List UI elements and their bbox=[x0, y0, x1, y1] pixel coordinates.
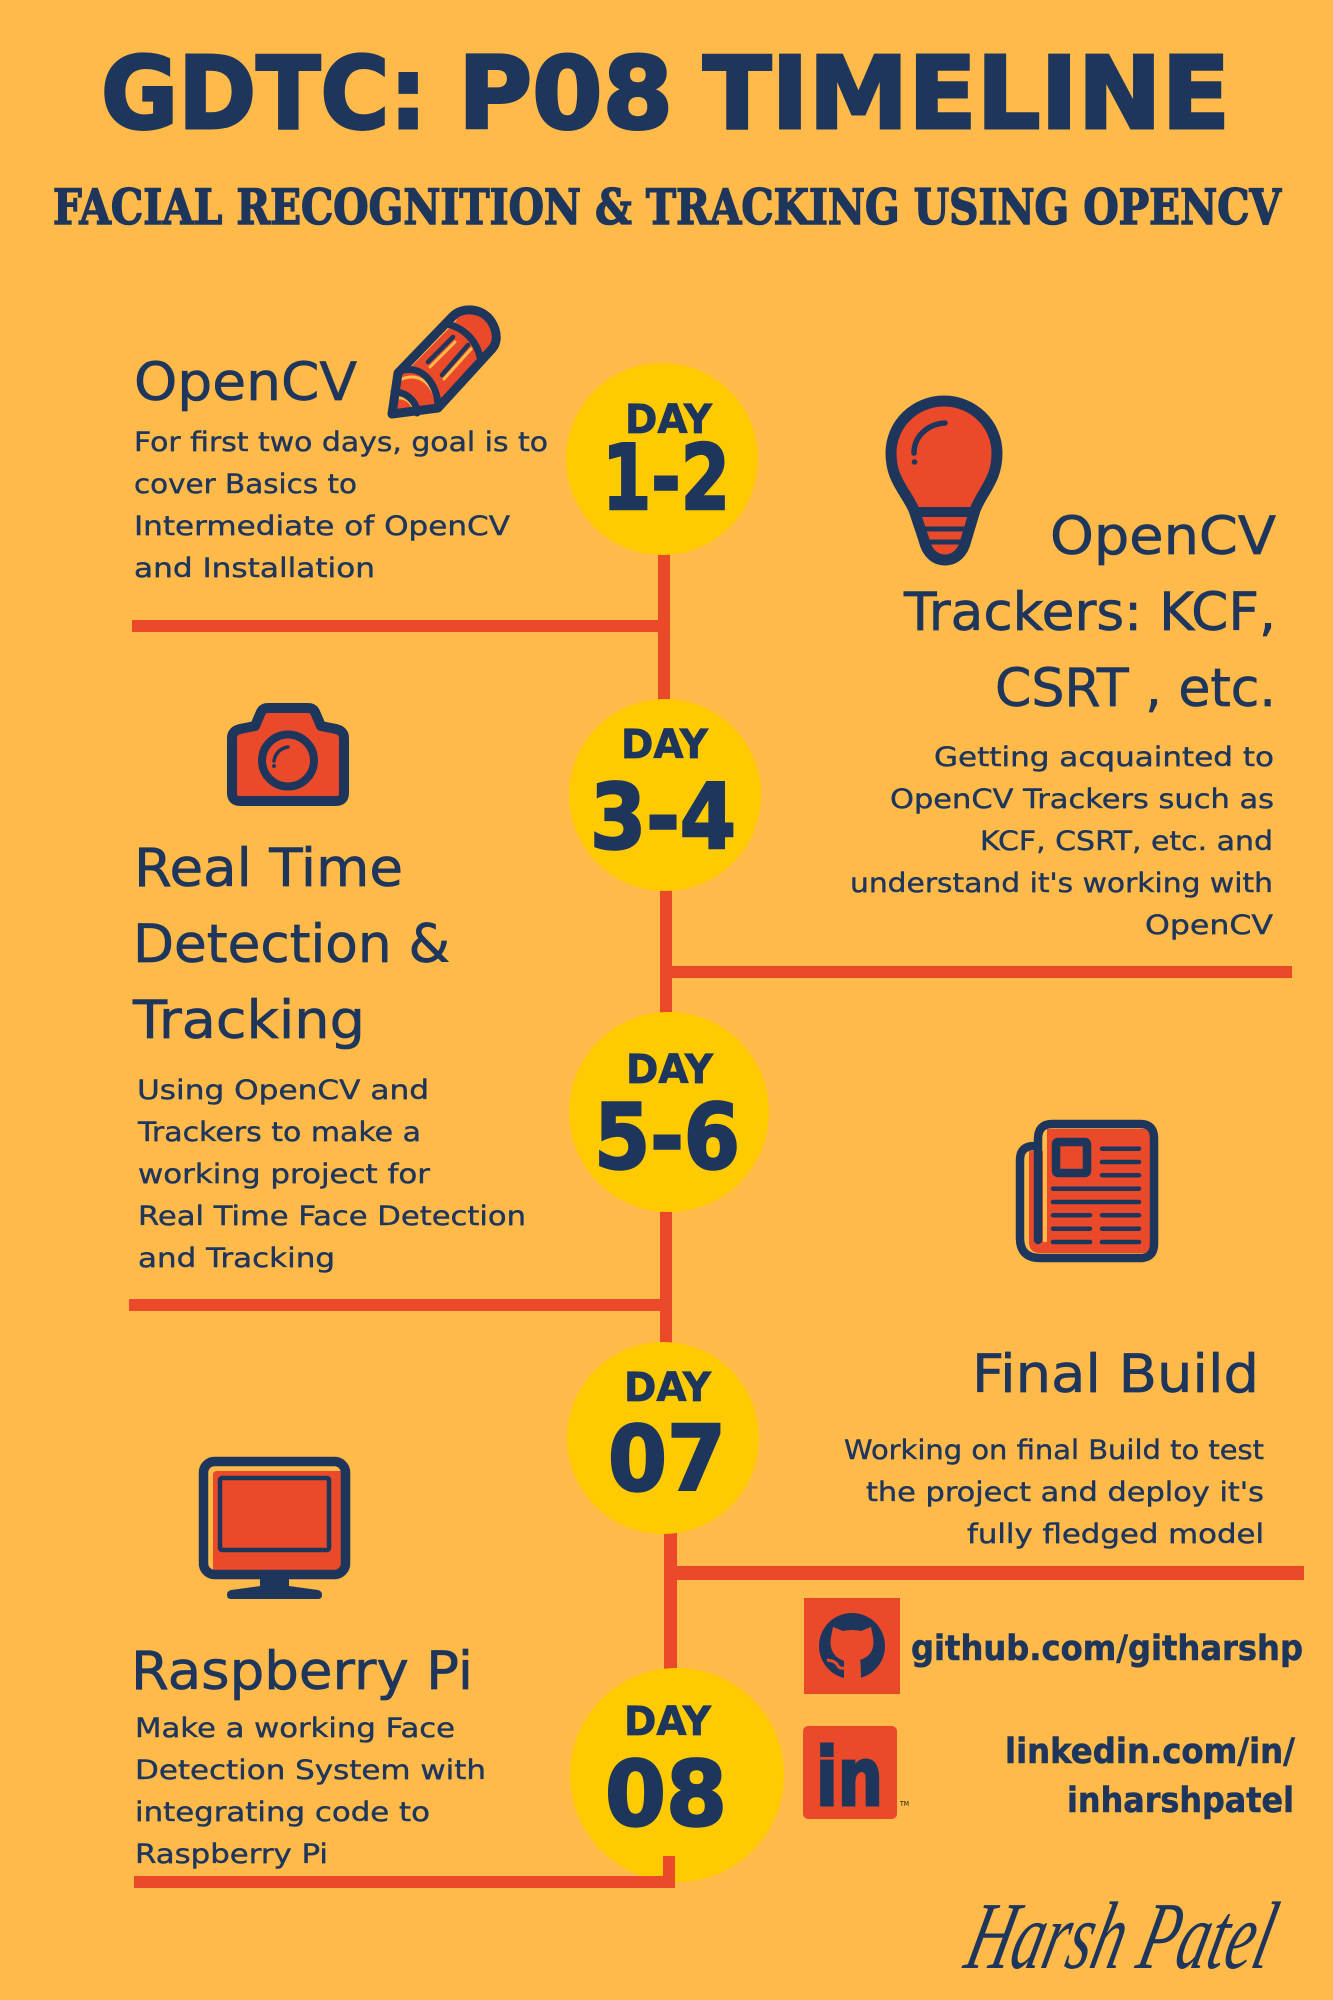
heading: OpenCV Trackers bbox=[903, 506, 1276, 719]
heading: Real Time Detection & Tracking: Real Time bbox=[134, 838, 403, 899]
text block: basics: cover Basics to bbox=[134, 469, 357, 500]
text block: trackers: OpenCV Trackers such as bbox=[890, 784, 1274, 815]
text block: raspberry pi: Raspberry Pi bbox=[135, 1839, 328, 1870]
heading: Raspberry Pi: Raspberry Pi bbox=[131, 1641, 473, 1702]
heading: Final Build: Final Build bbox=[972, 1344, 1259, 1405]
panel: day 1-2 badge: DAY bbox=[625, 397, 713, 443]
heading: OpenCV: OpenCV bbox=[134, 352, 357, 413]
text block: trackers: KCF, CSRT, etc. and bbox=[980, 826, 1273, 857]
text block: raspberry pi: integrating code to bbox=[135, 1797, 430, 1828]
panel: OpenCV trackers bbox=[850, 506, 1276, 941]
heading: OpenCV Trackers: Trackers: KCF, bbox=[903, 582, 1276, 643]
text block: trackers: Getting acquainted to bbox=[934, 742, 1274, 773]
text block: raspberry pi bbox=[135, 1713, 486, 1870]
panel: day 08 badge: 08 bbox=[605, 1742, 727, 1847]
link: linkedin: inharshpatel bbox=[1067, 1781, 1294, 1821]
text block: real time: and Tracking bbox=[138, 1243, 335, 1274]
icon: monitor bbox=[204, 1462, 346, 1599]
text block: raspberry pi: Detection System with bbox=[135, 1755, 486, 1786]
text block: trackers: OpenCV bbox=[1145, 910, 1274, 941]
panel: final build bbox=[844, 1344, 1264, 1550]
panel: day 07 badge bbox=[567, 1342, 759, 1534]
text block: real time: Real Time Face Detection bbox=[138, 1201, 526, 1232]
panel: day 3-4 badge: 3-4 bbox=[590, 765, 736, 870]
icon: github bbox=[804, 1598, 900, 1694]
text block: real time: Using OpenCV and bbox=[137, 1075, 429, 1106]
panel: day 08 badge: DAY bbox=[624, 1699, 712, 1745]
text block: final build: fully fledged model bbox=[967, 1519, 1264, 1550]
text block: trackers: understand it's working with bbox=[850, 868, 1273, 899]
title bbox=[101, 35, 1230, 152]
heading: OpenCV Trackers: OpenCV bbox=[1050, 506, 1276, 567]
title: P08 bbox=[458, 35, 673, 152]
text block: final build: Working on final Build to test bbox=[844, 1435, 1264, 1466]
panel: real time detection bbox=[132, 838, 526, 1274]
connector: final branch over day 08 badge bbox=[134, 1856, 675, 1888]
text block: basics bbox=[134, 427, 548, 584]
heading: OpenCV Trackers: CSRT , etc. bbox=[995, 658, 1276, 719]
panel: day 07 badge: DAY bbox=[624, 1365, 712, 1411]
text block: trackers bbox=[850, 742, 1274, 941]
heading: Real Time Detection & Tracking: Detection & bbox=[133, 914, 450, 975]
link: linkedin bbox=[1005, 1732, 1295, 1821]
icon: light bulb bbox=[891, 401, 1000, 560]
panel: day 3-4 badge bbox=[569, 699, 761, 891]
panel: day 5-6 badge: 5-6 bbox=[594, 1085, 740, 1190]
text block: real time: working project for bbox=[138, 1159, 431, 1190]
text block: raspberry pi: Make a working Face bbox=[135, 1713, 455, 1744]
text block: real time: Trackers to make a bbox=[137, 1117, 421, 1148]
panel: day 07 badge: 07 bbox=[608, 1407, 726, 1512]
title: TIMELINE bbox=[703, 35, 1230, 152]
icon: pencil bbox=[392, 310, 496, 414]
panel: day 08 badge bbox=[570, 1668, 784, 1882]
text block: basics: Intermediate of OpenCV bbox=[134, 511, 511, 542]
panel: OpenCV basics bbox=[134, 352, 548, 584]
panel: raspberry pi bbox=[131, 1641, 486, 1870]
panel: day 1-2 badge: 1-2 bbox=[602, 426, 730, 531]
link: linkedin: linkedin.com/in/ bbox=[1005, 1732, 1295, 1772]
panel: day 3-4 badge: DAY bbox=[621, 722, 709, 768]
panel: day 1-2 badge bbox=[566, 363, 758, 555]
text block: basics: For first two days, goal is to bbox=[134, 427, 548, 458]
timeline connector lines bbox=[129, 540, 1304, 1675]
panel: day 5-6 badge bbox=[569, 1012, 769, 1212]
text block: basics: and Installation bbox=[134, 553, 375, 584]
text block: real time bbox=[137, 1075, 526, 1274]
icon: linkedin: TM bbox=[899, 1800, 909, 1808]
panel: day 5-6 badge: DAY bbox=[626, 1047, 714, 1093]
icon: linkedin: in bbox=[816, 1731, 883, 1824]
title: GDTC: bbox=[101, 35, 427, 152]
icon: newspaper bbox=[1020, 1124, 1154, 1258]
icon: camera bbox=[232, 708, 347, 801]
heading: Real Time Detection & Tracking bbox=[132, 838, 450, 1051]
text block: final build: the project and deploy it's bbox=[866, 1477, 1264, 1508]
link: github: github.com/githarshp bbox=[911, 1629, 1303, 1669]
text block: final build bbox=[844, 1435, 1264, 1550]
heading: Real Time Detection & Tracking: Tracking bbox=[132, 990, 365, 1051]
